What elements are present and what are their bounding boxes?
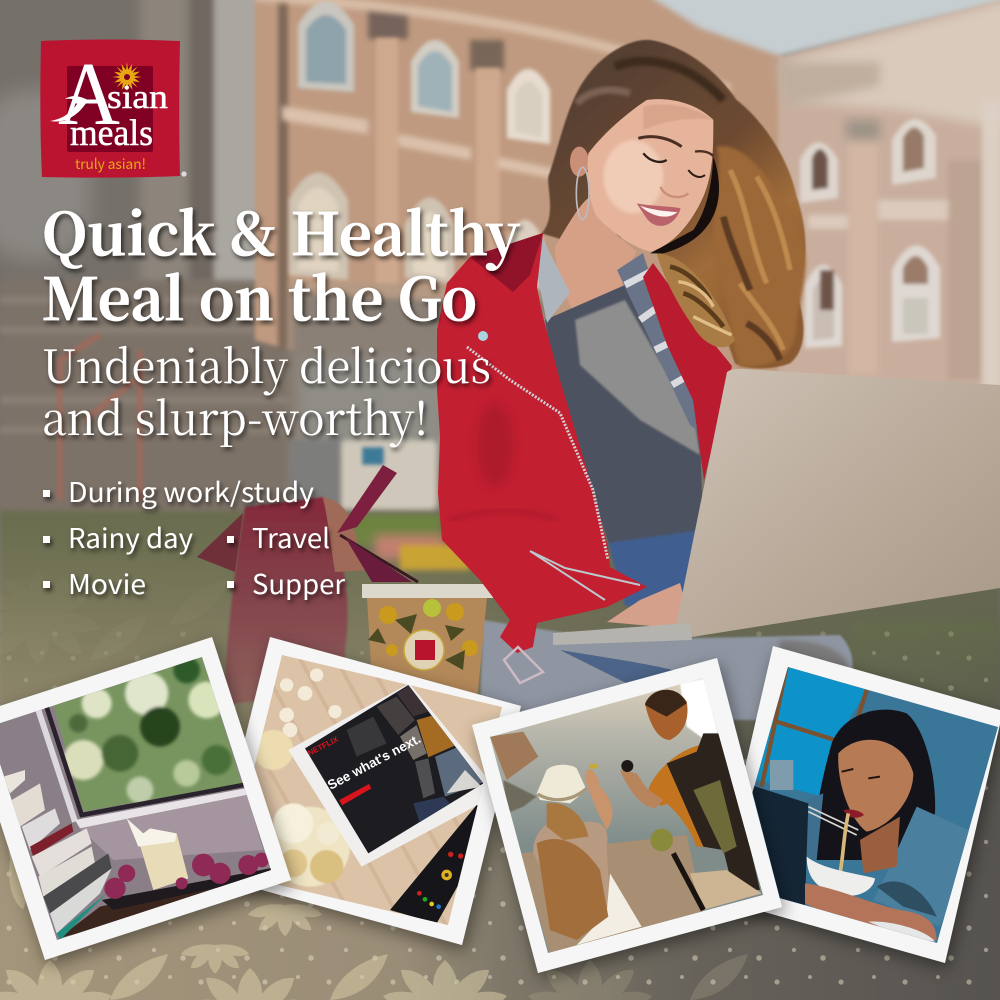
table and tray [58,867,287,938]
window frame [47,707,243,815]
subheading: and slurp-worthy! [42,383,428,449]
woman with laptop [362,40,1000,730]
background: building windows [289,2,940,348]
remote control [390,805,478,922]
logo: meals [70,113,153,154]
paper noodle cup [362,584,493,700]
tablet [288,683,500,867]
face and hand [838,740,913,832]
photo card: rainy day window [0,637,291,960]
cliff [490,732,538,780]
candle [138,833,188,890]
photo card: travellers at the coast [472,658,782,973]
woman's hair and jacket [815,710,935,860]
occasions bullet list: During work/study [68,471,314,510]
hair front and face drawn from photo coordinates [570,61,806,367]
logo star [112,62,142,92]
occasions bullet list [43,471,346,602]
red jacket [437,233,647,653]
photo card: movie on tablet [242,637,527,956]
bottom batik pattern panel [0,520,1000,1000]
handbag [197,465,418,705]
logo [40,40,187,178]
shrub [650,829,673,851]
dried flowers [104,853,269,899]
occasions bullet list: Travel [252,517,330,556]
noodles and bowl [808,807,858,835]
plaid shirt [537,237,570,323]
hair back, neck drawn from photo coordinates [542,40,805,368]
photo card: movie on tablet: NETFLIX [306,734,340,758]
sun glare [680,678,718,738]
laptop [553,369,1000,645]
photo card: eating noodles at laptop [715,646,1000,963]
background: columns and ledges [368,7,408,39]
jeans [608,530,702,612]
dark laptop [751,785,808,905]
photo card: movie on tablet: See what's next. [325,731,423,793]
logo: truly asian! [75,154,146,174]
window glass [53,657,242,812]
grey jeans leg [480,620,853,720]
background: sky and right wing [640,0,1000,56]
hand on keyboard [607,583,690,628]
occasions bullet list: Movie [68,563,146,602]
occasions bullet list: Rainy day [68,517,193,556]
popcorn [279,668,342,737]
subheading [42,331,491,449]
logo: A [58,45,120,144]
grey shirt [545,285,703,547]
books [3,770,112,940]
occasions bullet list: Supper [252,563,346,602]
logo: sian [107,79,168,116]
tablet posters [347,685,485,823]
headline [42,188,520,337]
background: lower wall, van and grass [290,290,550,510]
headline: Meal on the Go [42,253,477,337]
subheading: Undeniably delicious [42,331,491,397]
headline: Quick & Healthy [42,188,520,272]
woman traveller [533,822,609,905]
man [645,691,688,740]
ground [520,835,703,955]
